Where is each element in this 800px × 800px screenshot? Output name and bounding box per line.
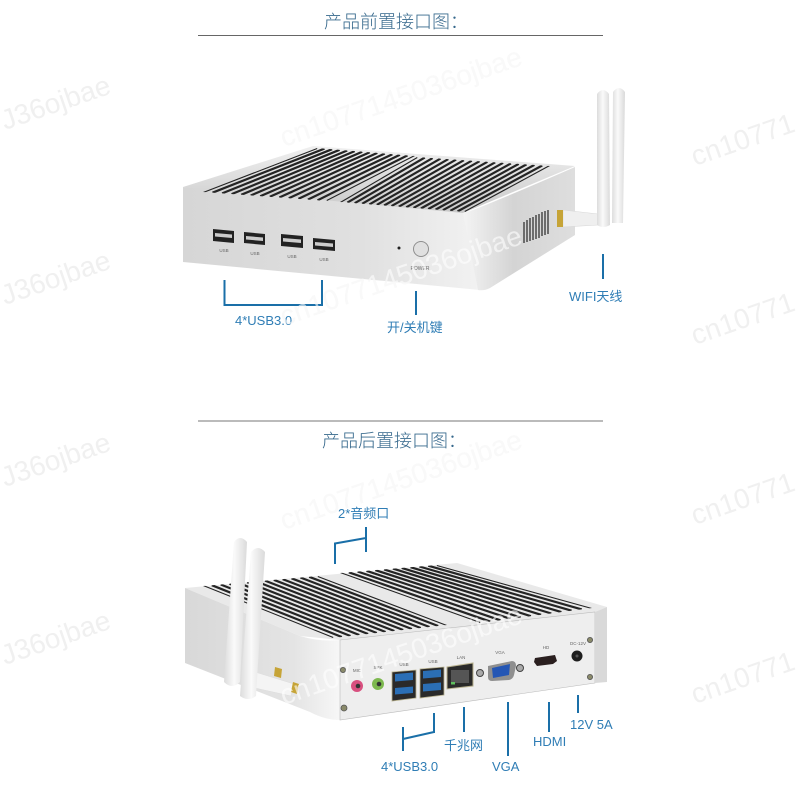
line: power bbox=[415, 291, 417, 315]
USB port captions bbox=[219, 248, 329, 262]
front antennas bbox=[557, 88, 625, 227]
rear port captions: SPK bbox=[373, 665, 383, 670]
left side bbox=[185, 588, 340, 720]
power caption: POWER bbox=[411, 266, 430, 272]
rear USB stack 1 bbox=[392, 670, 416, 701]
heading: front ports: 产品前置接口图： bbox=[324, 12, 468, 32]
foreground watermarks: cn1077145036ojbae bbox=[276, 599, 526, 711]
SPK jack bbox=[372, 678, 384, 690]
rear mini PC device bbox=[185, 563, 607, 720]
gold connector bbox=[557, 210, 563, 227]
bracket: front USB bbox=[224, 280, 322, 305]
power button bbox=[414, 242, 428, 256]
rear port captions: VGA bbox=[495, 650, 505, 655]
rear port captions: MIC bbox=[353, 668, 362, 673]
heatsink fins left bbox=[203, 576, 447, 638]
label: wifi antenna: WIFI天线 bbox=[569, 289, 622, 304]
background watermarks: J36ojbae bbox=[0, 69, 114, 136]
rear port captions: USB bbox=[399, 662, 409, 667]
heading: rear ports: 产品后置接口图： bbox=[322, 431, 466, 451]
DC jack bbox=[572, 650, 582, 662]
right side bbox=[463, 167, 575, 290]
USB port 4 bbox=[313, 238, 335, 251]
background watermarks: cn10771 bbox=[687, 645, 799, 710]
USB port captions: USB bbox=[319, 257, 329, 262]
bracket: rear USB bbox=[403, 713, 434, 751]
background watermarks: cn1077145036ojbae bbox=[276, 41, 526, 153]
rear antennas bbox=[224, 538, 299, 699]
label: 12V 5A: 12V 5A bbox=[570, 717, 613, 732]
line: HDMI bbox=[548, 702, 550, 732]
rear port captions bbox=[353, 641, 586, 673]
USB port captions: USB bbox=[287, 254, 297, 259]
heatsink fins right bbox=[340, 565, 592, 623]
divider bbox=[198, 420, 603, 422]
background watermarks: cn1077145036ojbae bbox=[276, 220, 526, 332]
rear panel plate bbox=[340, 612, 595, 720]
label: audio: 2*音频口 bbox=[338, 506, 389, 521]
power LED bbox=[398, 246, 400, 250]
rear port captions: LAN bbox=[457, 655, 465, 660]
antenna back bbox=[224, 538, 247, 686]
background watermarks: J36ojbae bbox=[0, 244, 114, 311]
bracket: audio bbox=[335, 527, 366, 564]
USB port 2 bbox=[244, 232, 265, 245]
front mini PC device bbox=[183, 146, 575, 290]
antenna rear bbox=[612, 88, 625, 223]
background watermarks: J36ojbae bbox=[0, 426, 114, 493]
label: 4*USB3.0 rear: 4*USB3.0 bbox=[381, 759, 438, 774]
foreground watermarks bbox=[276, 41, 526, 711]
background watermarks: cn10771 bbox=[687, 107, 799, 172]
label: 4*USB3.0 front: 4*USB3.0 bbox=[235, 313, 292, 328]
device top surface bbox=[185, 563, 607, 640]
line: wifi bbox=[602, 254, 604, 279]
gold connector upper bbox=[274, 667, 282, 678]
line: VGA bbox=[507, 702, 509, 756]
antenna front bbox=[240, 548, 265, 699]
heatsink fins right bbox=[340, 157, 550, 212]
foreground watermarks: cn1077145036ojbae bbox=[276, 220, 526, 332]
HDMI port bbox=[534, 655, 557, 666]
screws bbox=[340, 637, 593, 711]
label: gigabit LAN: 千兆网 bbox=[444, 738, 483, 753]
USB port captions: USB bbox=[219, 248, 229, 253]
device top surface bbox=[183, 146, 575, 213]
USB port 3 bbox=[281, 234, 303, 248]
USB port captions: USB bbox=[250, 251, 260, 256]
foreground watermarks: cn1077145036ojbae bbox=[276, 41, 526, 153]
antenna front bbox=[597, 90, 610, 227]
label: VGA: VGA bbox=[492, 759, 520, 774]
rear port captions: DC-12V bbox=[570, 641, 586, 646]
right edge bbox=[595, 607, 607, 683]
background watermarks: cn10771 bbox=[687, 286, 799, 351]
rear port captions: HD bbox=[543, 645, 550, 650]
label: power key: 开/关机键 bbox=[387, 320, 443, 335]
LAN port bbox=[447, 663, 473, 689]
rear port captions: USB bbox=[428, 659, 438, 664]
label: HDMI: HDMI bbox=[533, 734, 566, 749]
MIC jack bbox=[351, 680, 363, 692]
gold connector lower bbox=[291, 682, 299, 694]
background watermarks: cn1077145036ojbae bbox=[276, 424, 526, 536]
rear USB stack 2 bbox=[420, 667, 444, 698]
side vent bbox=[524, 210, 548, 243]
heatsink fins left bbox=[203, 148, 415, 201]
front face bbox=[183, 187, 480, 290]
line: DC bbox=[577, 695, 579, 713]
background watermarks: cn10771 bbox=[687, 466, 799, 531]
USB port 1 bbox=[213, 229, 234, 243]
VGA port bbox=[476, 661, 524, 681]
background watermarks: J36ojbae bbox=[0, 604, 114, 671]
antenna connector bbox=[255, 672, 294, 696]
line: LAN bbox=[463, 707, 465, 732]
antenna connector bbox=[563, 210, 598, 227]
foreground watermarks: cn1077145036ojbae bbox=[276, 424, 526, 536]
